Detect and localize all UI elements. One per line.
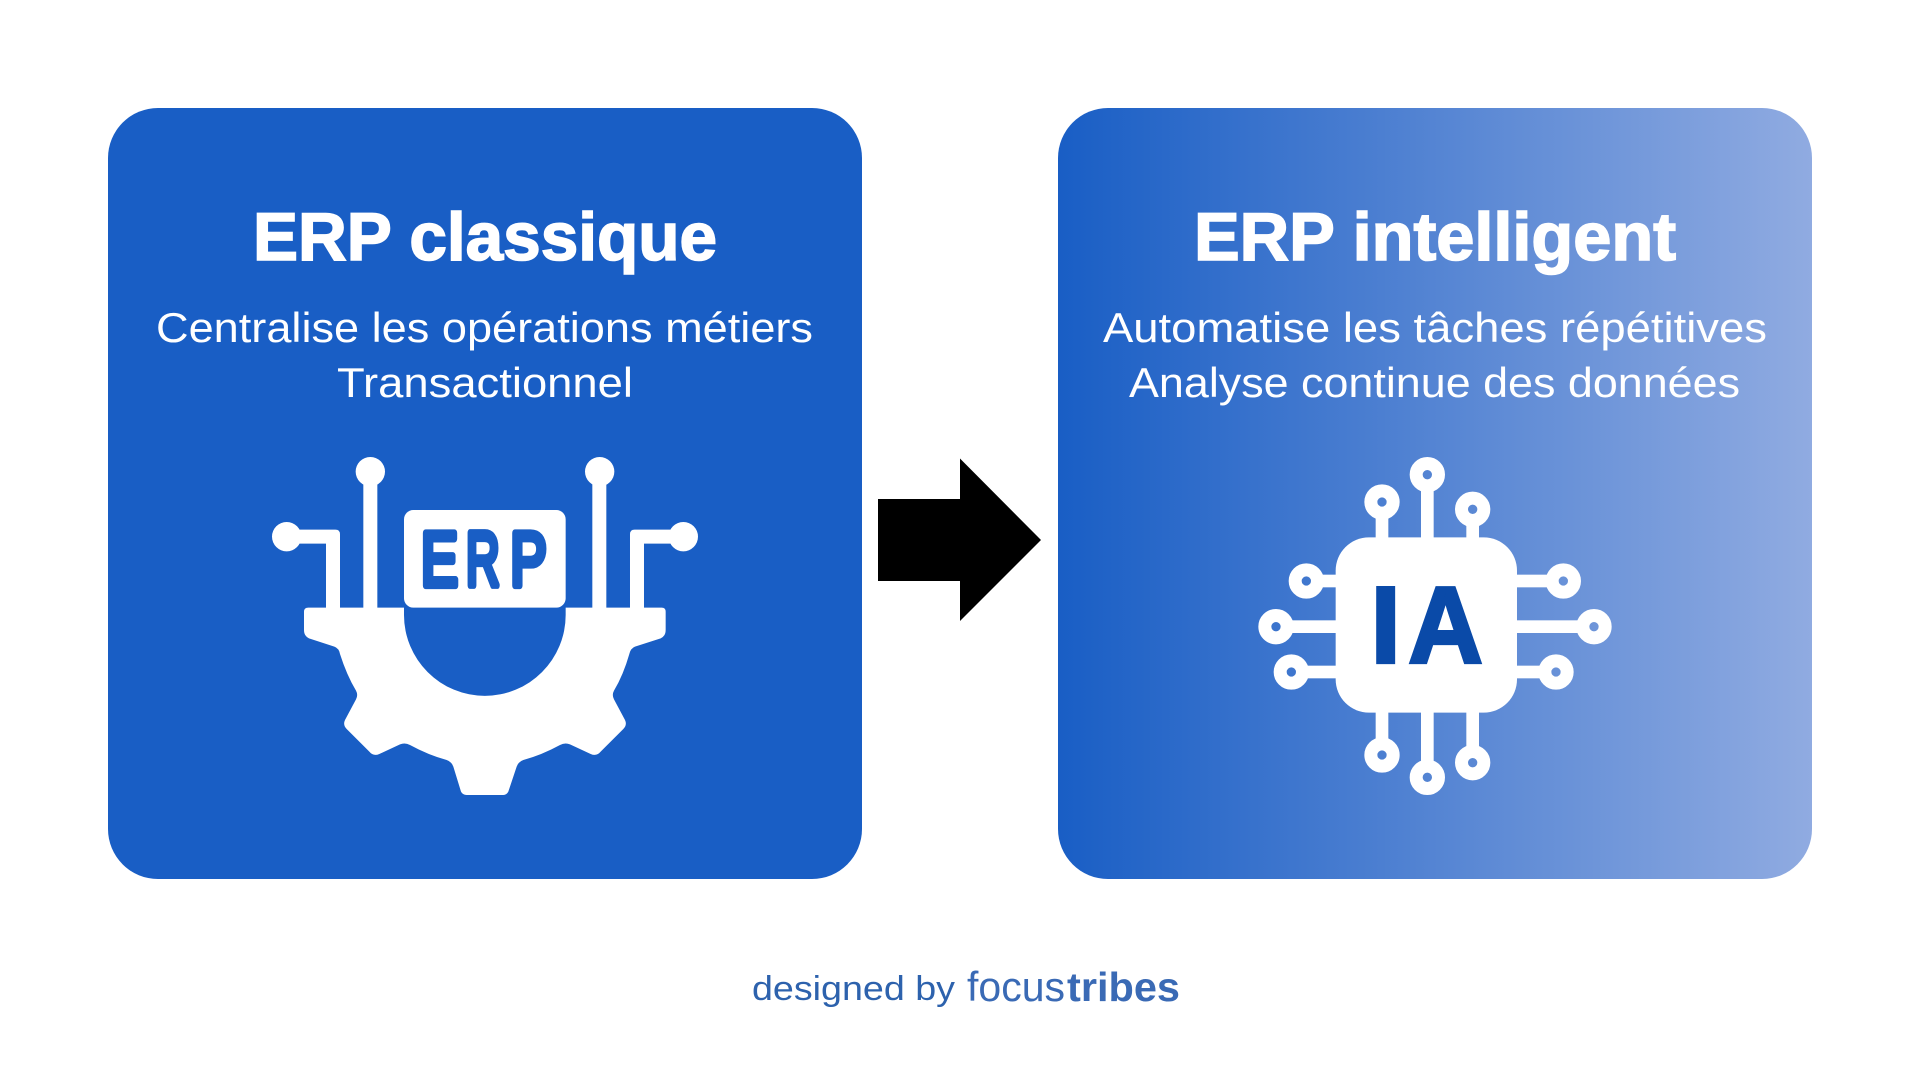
text: designed by: designed by	[752, 970, 955, 1008]
icon: ERP gear: P	[510, 517, 547, 602]
arrow	[878, 458, 1041, 621]
heading: ERP intelligent: ERP intelligent	[1194, 199, 1676, 275]
heading: ERP classique: ERP classique	[253, 199, 717, 275]
footer: designed by focustribes	[752, 963, 1180, 1010]
icon: IA chip: I	[1371, 564, 1401, 685]
icon: IA chip	[1265, 463, 1605, 788]
panel: ERP classique	[108, 108, 862, 879]
text: description line 2: Transactionnel	[337, 359, 633, 406]
text: description line 1: Centralise les opérations métiers	[156, 304, 813, 351]
panel: ERP intelligent	[1058, 108, 1812, 879]
icon: IA chip: A	[1408, 564, 1483, 685]
logo: focus: focus	[967, 963, 1065, 1010]
logo: tribes: tribes	[1067, 964, 1180, 1010]
icon: ERP gear: E	[421, 517, 458, 602]
icon: ERP gear	[272, 457, 698, 795]
text: description line 1: Automatise les tâches répétitives	[1103, 304, 1767, 351]
text: description line 2: Analyse continue des données	[1129, 359, 1740, 406]
icon: ERP gear: R	[466, 517, 500, 602]
